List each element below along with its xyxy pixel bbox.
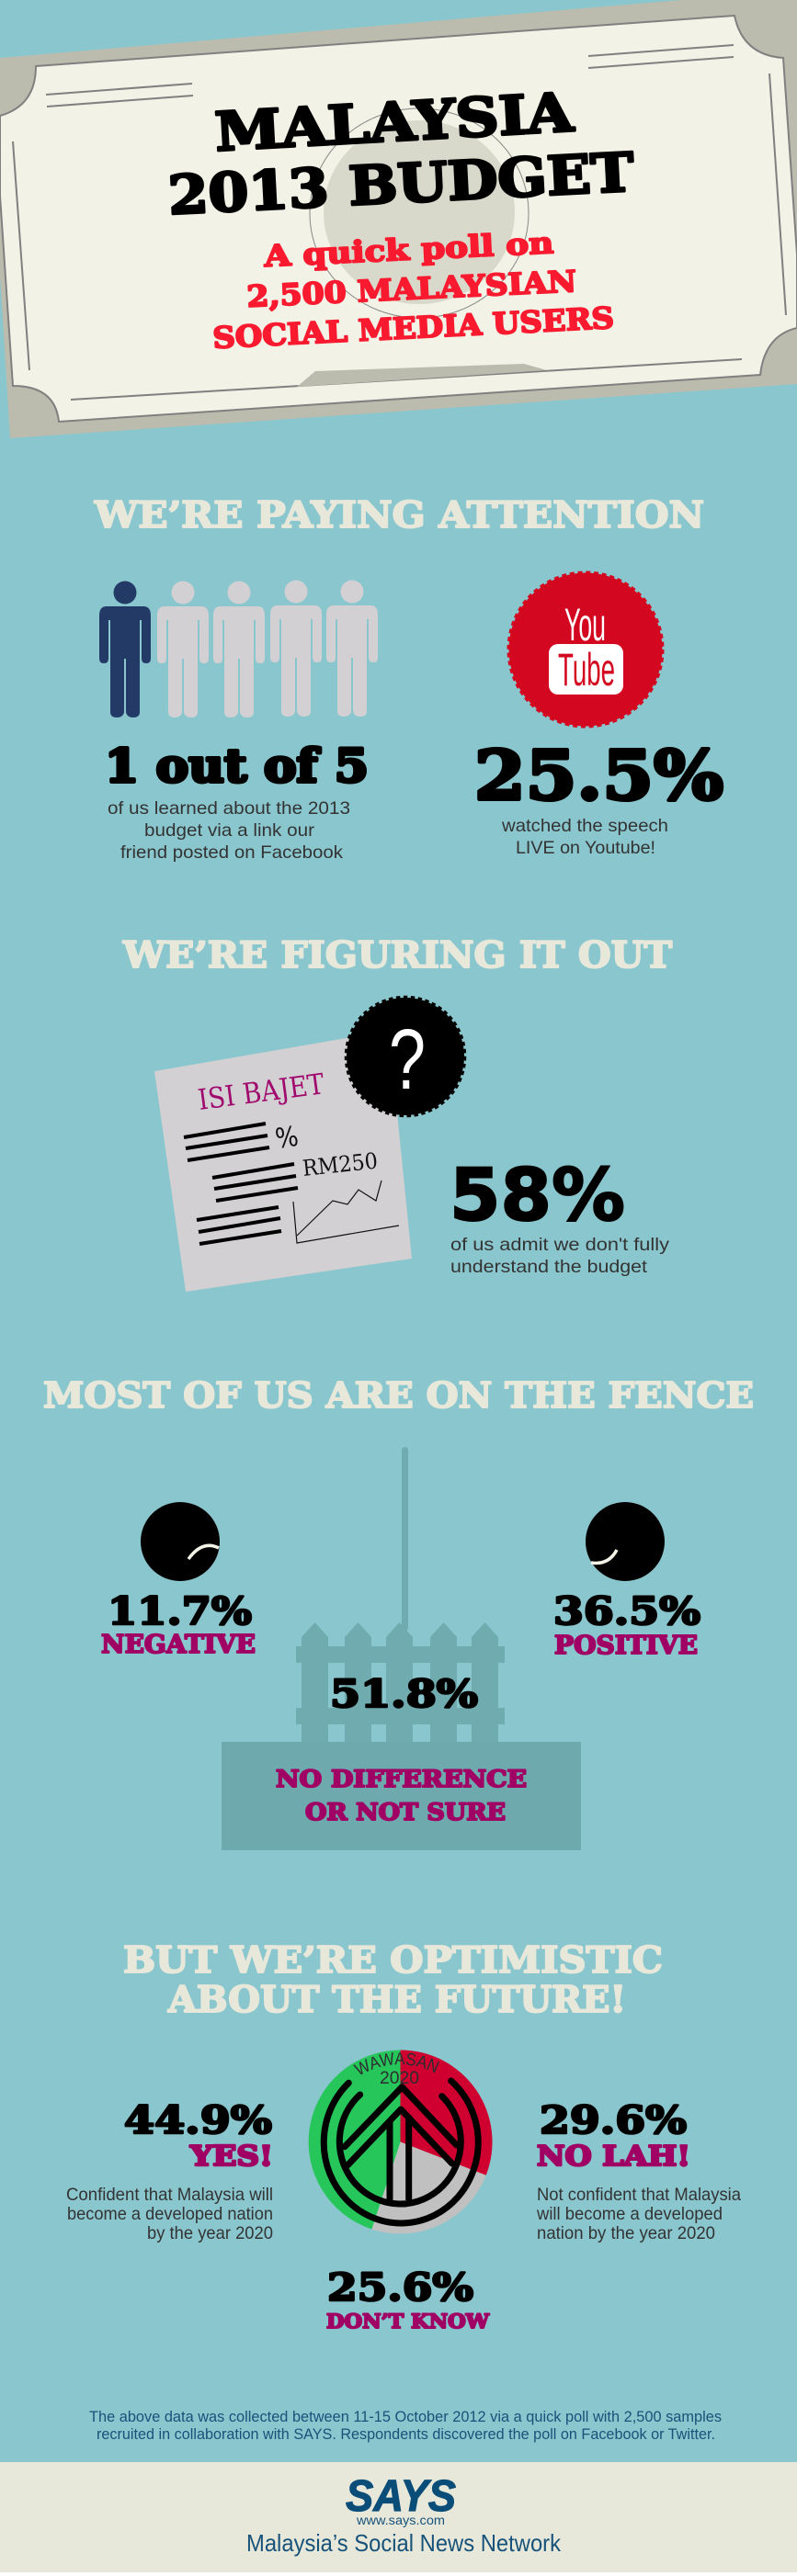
stat: yes [66,2098,273,2243]
icon: youtube badge: You [564,599,606,650]
document title: ISI BAJET [196,1068,326,1117]
text: 58% description: understand the budget [450,1257,648,1277]
text: 58% description [450,1235,669,1277]
stat: yes: by the year 2020 [147,2223,273,2243]
wawasan logo mark [324,2081,478,2223]
stat: 1 out of 5: 1 out of 5 [105,739,369,793]
stat: 58%: 58% [450,1155,625,1237]
stat: positive: POSITIVE [554,1632,698,1660]
stat: positive: 36.5% [553,1589,700,1633]
heading: on the fence: MOST OF US ARE ON THE FENCE [43,1374,754,1416]
stat: negative [101,1589,256,1659]
heading: optimistic about the future: ABOUT THE FUTURE! [167,1979,626,2021]
chart: wawasan 2020 pie [309,2051,493,2234]
text: facebook stat description: budget via a link our [144,820,315,841]
text: facebook stat description: friend posted on Facebook [120,842,343,863]
text: facebook stat description [108,798,350,863]
chart: wawasan 2020 pie: WAWASAN [353,2052,439,2074]
tagline: Malaysia’s Social News Network [246,2529,562,2557]
chart: wawasan 2020 pie: 2020 [380,2069,419,2088]
stat: no difference: 51.8% [330,1672,478,1716]
icon: five people [99,581,378,717]
title [166,81,635,227]
stat: yes: 44.9% [124,2098,272,2142]
icon: budget document [154,1031,412,1292]
stat: yes: YES! [189,2141,273,2173]
stat: no lah: will become a developed [536,2204,723,2224]
text: methodology note [89,2409,722,2443]
stat: no lah [536,2098,741,2243]
stat: no lah: nation by the year 2020 [537,2223,715,2243]
text: methodology note: The above data was collected between 11-15 October 2012 via a quick poll with 2,500 samples [89,2409,722,2425]
stat: no lah: NO LAH! [537,2141,690,2173]
subtitle [211,225,615,356]
text: youtube stat description [501,816,668,858]
subtitle: A quick poll on [262,225,554,274]
text: methodology note: recruited in collaboration with SAYS. Respondents discovered the poll on Facebook or Twitter. [97,2426,715,2443]
heading: optimistic about the future: BUT WE’RE OPTIMISTIC [123,1939,663,1982]
stat: negative: NEGATIVE [101,1631,256,1659]
stat: don't know: DON’T KNOW [326,2310,489,2333]
icon: budget document: RM250 [302,1148,379,1181]
title: MALAYSIA [213,81,575,164]
icon: budget document: % [273,1121,301,1156]
text: facebook stat description: of us learned about the 2013 [108,798,350,819]
stat: no lah: Not confident that Malaysia [537,2185,741,2205]
stat: no difference [276,1672,527,1825]
stat: positive [553,1589,700,1660]
panel: header ticket [0,0,797,438]
stat: no difference: NO DIFFERENCE [276,1766,527,1792]
text: youtube stat description: LIVE on Youtube! [516,838,655,858]
text: youtube stat description: watched the speech [501,816,668,836]
stat: negative: 11.7% [108,1589,252,1633]
subtitle: 2,500 MALAYSIAN [246,264,577,314]
icon: youtube badge [508,572,663,727]
stat: no lah: 29.6% [540,2098,687,2142]
subtitle: SOCIAL MEDIA USERS [211,300,615,356]
stat: don't know [326,2265,489,2333]
stat: 25.5%: 25.5% [474,737,723,816]
title: 2013 BUDGET [166,141,635,227]
heading: figuring it out: WE’RE FIGURING IT OUT [122,934,672,977]
mini line chart [293,1181,399,1243]
icon: youtube badge: Tube [558,644,615,695]
stat: no difference: OR NOT SURE [305,1799,506,1825]
icon: negative face [141,1502,220,1581]
text: 58% description: of us admit we don't fully [450,1235,669,1255]
stat: yes: become a developed nation [67,2204,273,2224]
icon: fence with post [222,1447,581,1850]
heading: optimistic about the future [123,1939,663,2021]
icon: question mark badge: ? [389,1011,426,1107]
stat: don't know: 25.6% [327,2265,473,2310]
panel: footer [0,2462,797,2572]
icon: question mark badge [346,997,465,1116]
heading: paying attention: WE’RE PAYING ATTENTION [94,494,704,537]
website: www.says.com [356,2514,445,2527]
stat: yes: Confident that Malaysia will [66,2185,273,2205]
logo: says: SAYS [346,2472,456,2521]
icon: positive face [586,1502,665,1581]
